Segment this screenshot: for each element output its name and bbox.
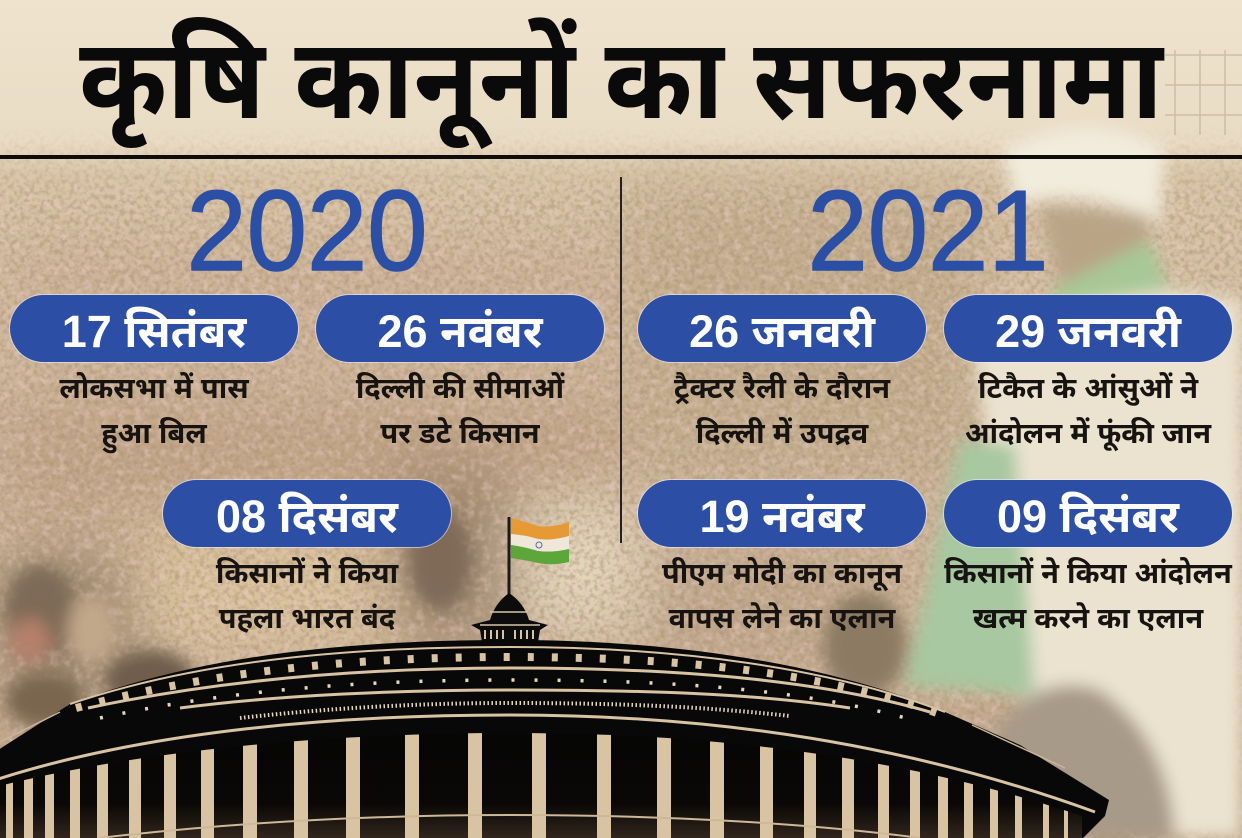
description: टिकैत के आंसुओं ने <box>978 373 1198 405</box>
description: दिल्ली की सीमाओं <box>356 373 564 405</box>
description: हुआ बिल <box>101 418 207 450</box>
parliament building with flag <box>0 517 1109 838</box>
description: खत्म करने का एलान <box>973 603 1203 635</box>
date card: 26 नवंबर <box>315 294 605 450</box>
pill: 26 नवंबर <box>377 306 543 357</box>
description: लोकसभा में पास <box>59 373 249 405</box>
roof bands <box>0 647 1095 812</box>
description <box>59 372 250 454</box>
description: पीएम मोदी का कानून <box>662 558 902 590</box>
colonnade <box>0 733 1082 838</box>
description: किसानों ने किया <box>216 558 398 590</box>
pill <box>638 480 926 547</box>
description: पर डटे किसान <box>380 418 540 450</box>
parliament lantern cap <box>471 593 548 642</box>
date card: 29 जनवरी <box>943 294 1233 452</box>
heading: year 2021: 2021 <box>808 168 1048 295</box>
pill <box>316 295 604 362</box>
pill: 29 जनवरी <box>995 306 1181 357</box>
description <box>356 372 565 450</box>
description <box>944 557 1232 635</box>
date card: 09 दिसंबर <box>943 479 1233 635</box>
description <box>674 372 891 450</box>
faint tower at top right <box>1165 50 1242 135</box>
blurred figures in the crowd <box>5 565 75 655</box>
description <box>216 557 399 635</box>
heading: year 2020: 2020 <box>187 168 427 295</box>
pill: 09 दिसंबर <box>997 491 1179 542</box>
title: कृषि कानूनों का सफरनामा <box>79 17 1163 143</box>
parliament dome body <box>0 640 1109 838</box>
icon: indian flag <box>508 517 569 597</box>
pill <box>944 295 1232 362</box>
date card: 26 जनवरी <box>637 294 927 450</box>
pill: 26 जनवरी <box>689 306 875 357</box>
description: किसानों ने किया आंदोलन <box>944 558 1232 590</box>
description: पहला भारत बंद <box>219 603 395 635</box>
pill: 19 नवंबर <box>699 491 865 542</box>
date card: 19 नवंबर <box>637 479 927 635</box>
description <box>662 557 903 635</box>
pill: 08 दिसंबर <box>216 491 398 542</box>
description: दिल्ली में उपद्रव <box>696 418 868 450</box>
pill <box>638 295 926 362</box>
pill <box>163 480 451 547</box>
pill <box>944 480 1232 547</box>
description <box>965 372 1212 452</box>
pill: 17 सितंबर <box>62 306 246 357</box>
date card: 08 दिसंबर <box>162 479 452 635</box>
date card: 17 सितंबर <box>9 294 299 454</box>
description: वापस लेने का एलान <box>669 603 895 635</box>
description: ट्रैक्टर रैली के दौरान <box>674 373 890 405</box>
description: आंदोलन में फूंकी जान <box>965 418 1211 450</box>
pill <box>10 295 298 362</box>
